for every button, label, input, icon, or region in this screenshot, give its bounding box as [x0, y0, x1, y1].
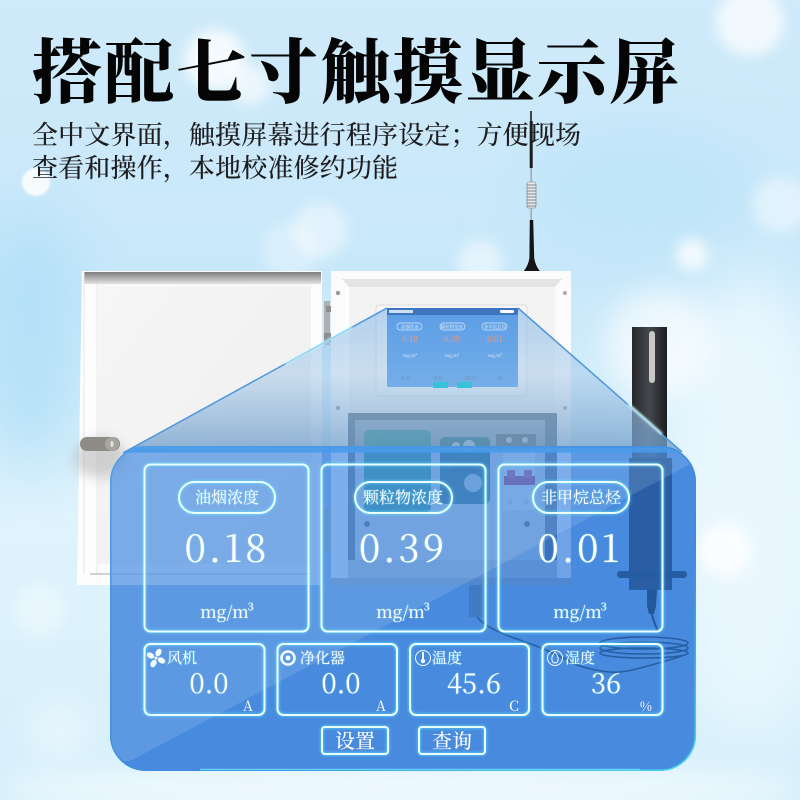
door lock handle [74, 437, 126, 478]
card: humidity: % [640, 696, 652, 715]
title: 搭配七寸触摸显示屏 [32, 17, 679, 118]
antenna [524, 111, 540, 271]
hinge [324, 301, 334, 345]
coiled cable [477, 617, 688, 672]
card: temperature: C [509, 696, 519, 716]
green circuit board [364, 430, 431, 512]
card: humidity [542, 644, 662, 715]
icon: thermometer [416, 650, 430, 666]
card: purifier: 净化器 [300, 647, 345, 668]
card: humidity: 湿度 [565, 647, 595, 668]
right cabinet [331, 271, 571, 585]
button: query [419, 725, 485, 754]
card: particulate concentration: 0.39 [359, 518, 447, 573]
mini touch screen preview: 0.01 [487, 334, 503, 344]
card: humidity: 36 [591, 662, 621, 701]
card: particulate concentration: mg/m³ [376, 598, 430, 623]
zoom projection cone [123, 308, 682, 453]
mini touch screen preview [387, 308, 518, 388]
button: query: 查询 [432, 725, 472, 754]
button: settings [322, 725, 388, 754]
control board [440, 437, 490, 504]
card: non-methane hydrocarbons [498, 464, 662, 632]
terminal block [496, 434, 536, 450]
card: temperature [410, 644, 529, 716]
card: temperature: 温度 [432, 647, 462, 668]
card: non-methane hydrocarbons: 0.01 [538, 518, 622, 573]
card: oil fume concentration [144, 464, 308, 632]
mini touch screen preview: 36 [497, 376, 503, 382]
subtitle text block: 查看和操作，本地校准修约功能 [32, 148, 398, 185]
mini touch screen preview: 0.39 [444, 334, 460, 344]
card: fan: 风机 [167, 647, 197, 668]
lower hinge [323, 508, 335, 553]
card: fan: A [243, 696, 254, 716]
panel backing tint [110, 446, 696, 771]
touch screen bezel [376, 305, 527, 396]
subtitle text block [32, 115, 581, 185]
card: oil fume concentration: 0.18 [185, 518, 269, 573]
mini touch screen preview: mg/m³ [445, 353, 459, 359]
card: purifier [278, 644, 397, 716]
icon: purifier [282, 652, 294, 664]
card: oil fume concentration: mg/m³ [200, 598, 254, 623]
card: fan [144, 644, 264, 716]
icon: humidity [548, 650, 562, 666]
button: settings: 设置 [335, 725, 375, 754]
mini touch screen preview: 0.0 [434, 376, 442, 382]
card: purifier: 0.0 [322, 662, 360, 701]
cable gland connector [469, 585, 482, 617]
mini touch screen preview: 45.6 [465, 376, 475, 382]
card: purifier: A [376, 696, 387, 716]
electrical panel [331, 413, 571, 585]
card: non-methane hydrocarbons: 非甲烷总烃 [541, 485, 622, 508]
sensor probe [477, 327, 688, 672]
card: temperature: 45.6 [447, 662, 501, 701]
mini touch screen preview: 0.18 [402, 334, 418, 344]
mini touch screen preview: mg/m³ [403, 353, 417, 359]
card: oil fume concentration: 油烟浓度 [195, 485, 259, 508]
mini touch screen preview: 0.0 [401, 376, 409, 382]
mini touch screen preview: 非甲烷总烃 [484, 324, 507, 330]
card: particulate concentration: 颗粒物浓度 [363, 485, 443, 508]
card: particulate concentration [322, 464, 486, 632]
card: non-methane hydrocarbons: mg/m³ [553, 598, 607, 623]
mini touch screen preview: 颗粒物浓度 [441, 324, 464, 330]
card: fan: 0.0 [190, 662, 228, 701]
circuit breaker [503, 450, 535, 510]
main display panel [110, 446, 696, 771]
left cabinet door [74, 271, 322, 585]
mini touch screen preview: mg/m³ [488, 353, 502, 359]
subtitle text block: 全中文界面，触摸屏幕进行程序设定；方便现场 [32, 115, 581, 152]
mini touch screen preview: 油烟浓度 [401, 324, 419, 330]
icon: fan [146, 648, 166, 668]
